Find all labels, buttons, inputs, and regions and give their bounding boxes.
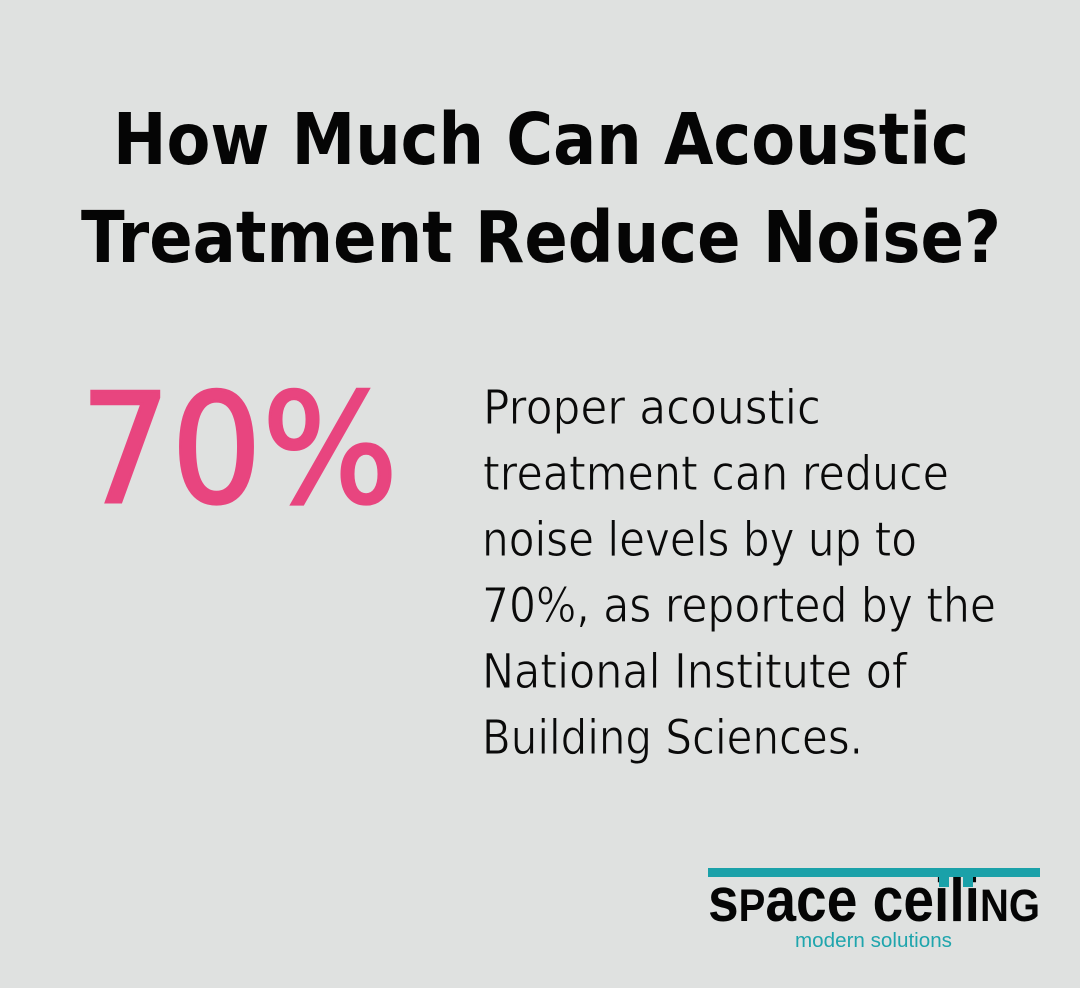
description text: Proper acoustic [483, 380, 821, 436]
description text: noise levels by up to [482, 512, 917, 568]
title: Treatment Reduce Noise? [81, 196, 1001, 279]
description text: 70%, as reported by the [482, 578, 996, 634]
description text: Building Sciences. [482, 710, 863, 766]
description text [482, 380, 996, 766]
title: How Much Can Acoustic [113, 98, 969, 181]
logo: Space Ceiling [708, 866, 1040, 952]
description text: treatment can reduce [483, 446, 949, 502]
logo wordmark: sPace ceiliNG [708, 866, 1040, 935]
statistic: 70%: 70% [80, 361, 398, 538]
logo tagline: modern solutions [795, 930, 952, 952]
logo ceiling bar [708, 868, 1040, 887]
description text: National Institute of [482, 644, 908, 700]
title [81, 98, 1001, 279]
